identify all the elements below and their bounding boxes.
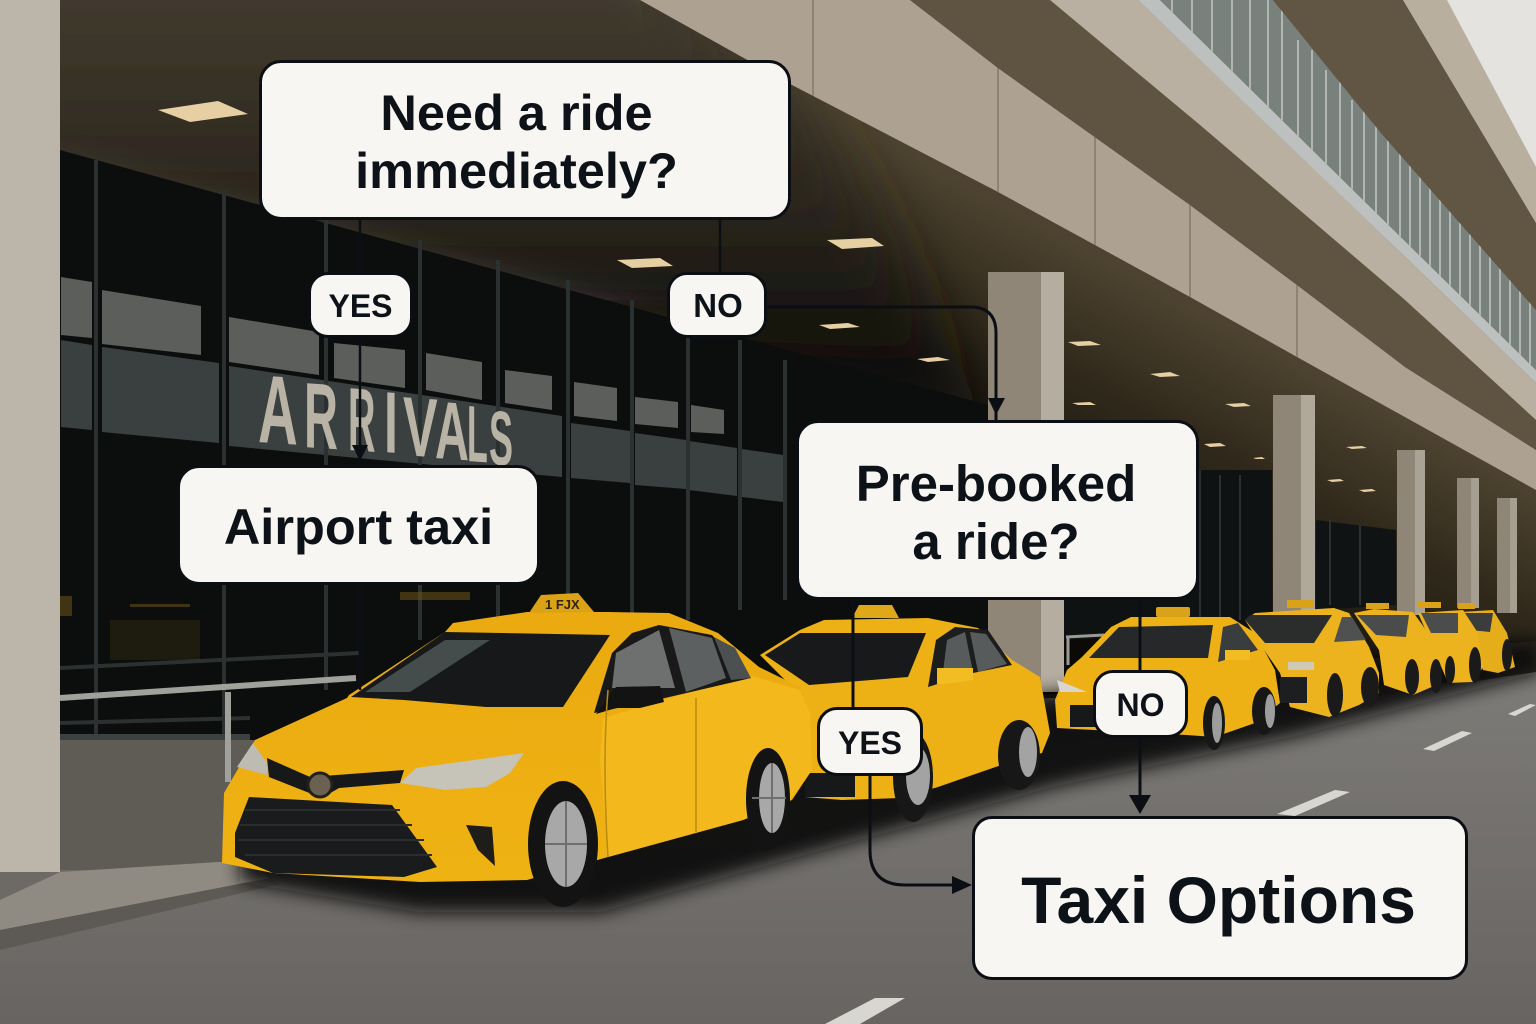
decision: need a ride immediately: Need a ride: [380, 84, 653, 141]
result: taxi options: [972, 816, 1468, 980]
main soffit right: [640, 0, 1536, 700]
connector: pre-booked to NO: [1138, 598, 1142, 798]
lead taxi door panel: [600, 676, 812, 857]
result: airport taxi: [177, 465, 540, 585]
connector: need a ride to YES: [359, 218, 361, 690]
result: airport taxi: Airport taxi: [224, 498, 493, 555]
taxi five: [1354, 603, 1442, 695]
main soffit left: [0, 0, 1000, 440]
left pillar: [0, 0, 60, 872]
arrivals sign: I: [384, 375, 398, 473]
upper concrete beam: [640, 0, 1536, 490]
taxi three: [1055, 607, 1280, 750]
decision: need a ride immediately: [259, 60, 791, 220]
label: YES second: YES: [838, 724, 902, 760]
warm reflections in glass: [60, 592, 470, 660]
lead taxi wheels: [528, 781, 598, 907]
arrowhead: taxi options from YES: [952, 876, 972, 894]
sky: [0, 0, 1536, 300]
glass facade: [60, 150, 988, 745]
arrowhead: airport taxi: [352, 445, 368, 461]
decision: need a ride immediately: immediately?: [355, 142, 678, 199]
label: NO second: [1093, 670, 1188, 738]
concrete window band: [1050, 0, 1536, 420]
label: NO: [667, 272, 767, 338]
decision: pre-booked a ride: a ride?: [912, 512, 1080, 570]
label: NO second: NO: [1116, 686, 1164, 722]
decision: pre-booked a ride: Pre-booked: [856, 454, 1136, 512]
lead taxi grille: [235, 797, 437, 877]
lead taxi grille band: [267, 758, 404, 798]
label: YES: [308, 272, 413, 338]
road: [0, 672, 1536, 1024]
arrivals sign: R: [348, 368, 375, 471]
decision: pre-booked a ride: [796, 420, 1199, 600]
arrivals sign: S: [489, 395, 513, 482]
label: NO: NO: [693, 287, 743, 324]
lead taxi mirror: [596, 686, 664, 714]
label: YES: YES: [328, 288, 393, 324]
arrivals sign: R: [304, 362, 338, 470]
label: YES second: [817, 707, 923, 776]
strip windows: [1138, 0, 1536, 400]
lead taxi side windows: [594, 625, 751, 713]
lane markings: [825, 704, 1536, 1024]
lead taxi: [222, 593, 812, 907]
roof soffit: [1273, 0, 1536, 310]
taxi seven: [1458, 603, 1515, 673]
lead taxi roof sign: 1 FJX: [545, 597, 580, 612]
roof fascia: [1403, 0, 1536, 223]
arrivals sign: A: [435, 384, 469, 479]
railings: [60, 678, 356, 782]
beam panel joints: [813, 0, 1297, 357]
arrivals sign: V: [403, 379, 438, 475]
taxi two: [760, 605, 1050, 822]
result: taxi options: Taxi Options: [1021, 863, 1416, 937]
lead taxi roof sign: [529, 593, 594, 613]
arrivals sign: [258, 355, 513, 482]
arrivals sign: L: [467, 389, 488, 481]
taxi six: [1418, 602, 1483, 684]
far glazing: [1064, 470, 1272, 640]
taxi four: [1245, 600, 1379, 717]
upper soffit: [910, 0, 1536, 450]
glass spandrels: [61, 340, 783, 502]
glass reflections: [61, 277, 724, 434]
connector: pre-booked to YES: [853, 598, 955, 885]
lead taxi windshield: [351, 632, 610, 707]
lead taxi headlights: [400, 753, 524, 790]
arrowhead: pre-booked: [988, 398, 1005, 415]
terminal pillars: [988, 272, 1517, 692]
window frames: [60, 160, 785, 740]
car shadows: [240, 640, 1536, 912]
ceiling lights: [158, 101, 1376, 492]
arrivals sign: A: [258, 355, 298, 466]
sidewalk: [60, 740, 320, 870]
connector: NO to pre-booked: [764, 307, 996, 420]
connector: need a ride to NO: [719, 218, 721, 272]
curb: [0, 860, 270, 930]
arrowhead: taxi options from NO: [1129, 795, 1151, 814]
